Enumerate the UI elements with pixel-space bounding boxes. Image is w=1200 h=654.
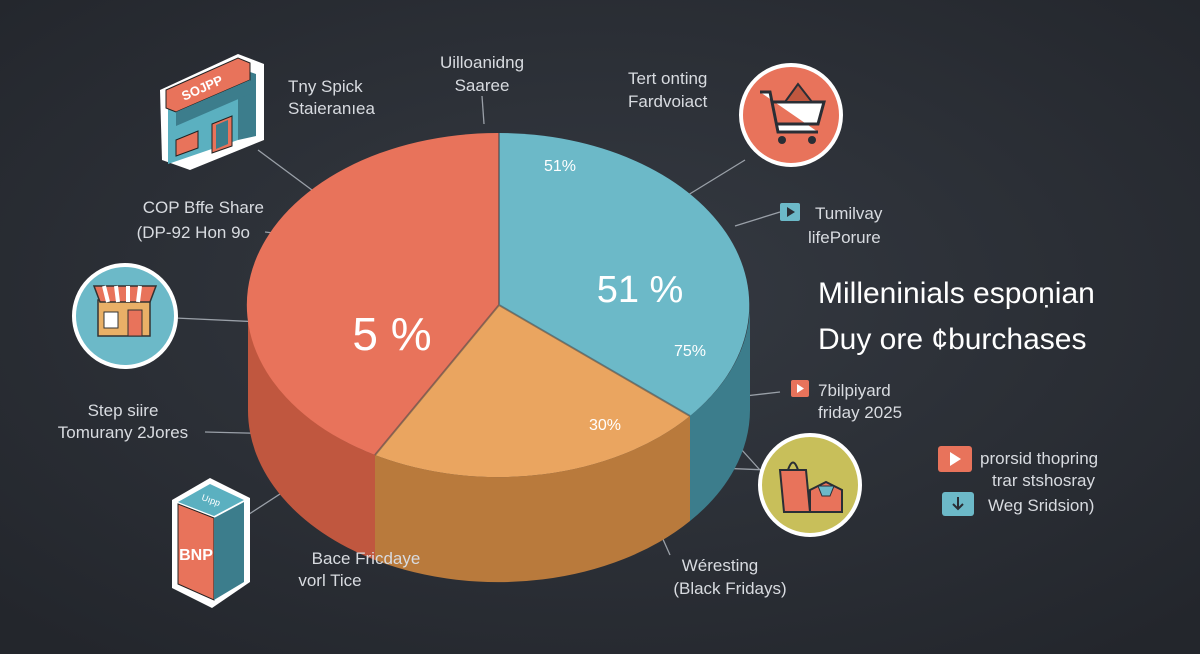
pie chart: 51 %	[597, 269, 683, 311]
label: bottom-right: (Black Fridays)	[673, 579, 787, 598]
pie chart	[247, 133, 750, 582]
legend: Weg Sridsion)	[988, 496, 1094, 515]
slice red	[247, 133, 499, 455]
label: bottom: vorl Tice	[298, 571, 362, 590]
label: top-right	[628, 69, 708, 111]
icon: shop box: SOJPP	[179, 72, 225, 104]
icon: shop circle	[74, 265, 176, 367]
side red	[248, 305, 375, 560]
icon: shop box	[160, 54, 264, 170]
label: lower-left: Tomurany 2Jores	[58, 423, 188, 442]
pie chart: 5 %	[352, 308, 432, 360]
label: lower-left: Step siire	[88, 401, 158, 420]
label: top-left: Staieranıea	[288, 99, 375, 118]
icon: cart circle	[741, 65, 841, 165]
label: lower-left	[58, 401, 188, 442]
label: top-right: Fardvoiact	[628, 92, 708, 111]
headline	[818, 277, 1095, 356]
headline: Milleninials espoṇian	[818, 277, 1095, 310]
pie labels: 51%	[544, 158, 576, 175]
slice orange	[375, 305, 690, 477]
icon: BNP box	[172, 478, 250, 608]
label: top-right: Tert onting	[628, 69, 707, 88]
label: right small with icon	[780, 203, 883, 247]
headline: Duy ore ¢burchases	[818, 323, 1086, 356]
label: top: Uilloanidng	[440, 53, 524, 72]
label: top-left: Tny Spick	[288, 77, 363, 96]
label: bottom	[298, 549, 420, 590]
side blue	[690, 305, 750, 521]
icon: BNP box: BNP	[179, 547, 213, 564]
label: top-left	[288, 77, 375, 118]
legend	[938, 446, 1098, 516]
icon: bags circle	[760, 435, 860, 535]
label: bottom-right: Wéresting	[682, 556, 758, 575]
pie chart: 30%	[589, 417, 621, 434]
label: bottom-right	[673, 556, 787, 598]
icon: BNP box: Uıpp	[200, 492, 222, 508]
pie chart: 75%	[674, 343, 706, 360]
legend: trar stshosray	[992, 471, 1095, 490]
label: 2025 with icon: friday 2025	[818, 403, 902, 422]
slice blue	[499, 133, 749, 416]
label: top	[440, 53, 524, 95]
label: left: COP Bffe Share	[143, 198, 264, 217]
label: left	[137, 198, 264, 242]
side orange	[375, 416, 690, 582]
label: right small with icon: lifePorure	[808, 228, 881, 247]
label: 2025 with icon: 7bilpiyard	[818, 381, 891, 400]
leader lines	[175, 96, 780, 555]
label: top: Saaree	[455, 76, 509, 95]
legend: prorsid thopring	[980, 449, 1098, 468]
label: right small with icon: Tumilvay	[815, 204, 883, 223]
label: left: (DP-92 Hon 9o	[137, 223, 250, 242]
label: 2025 with icon	[791, 380, 902, 422]
label: bottom: Bace Fricdaye	[312, 549, 420, 568]
